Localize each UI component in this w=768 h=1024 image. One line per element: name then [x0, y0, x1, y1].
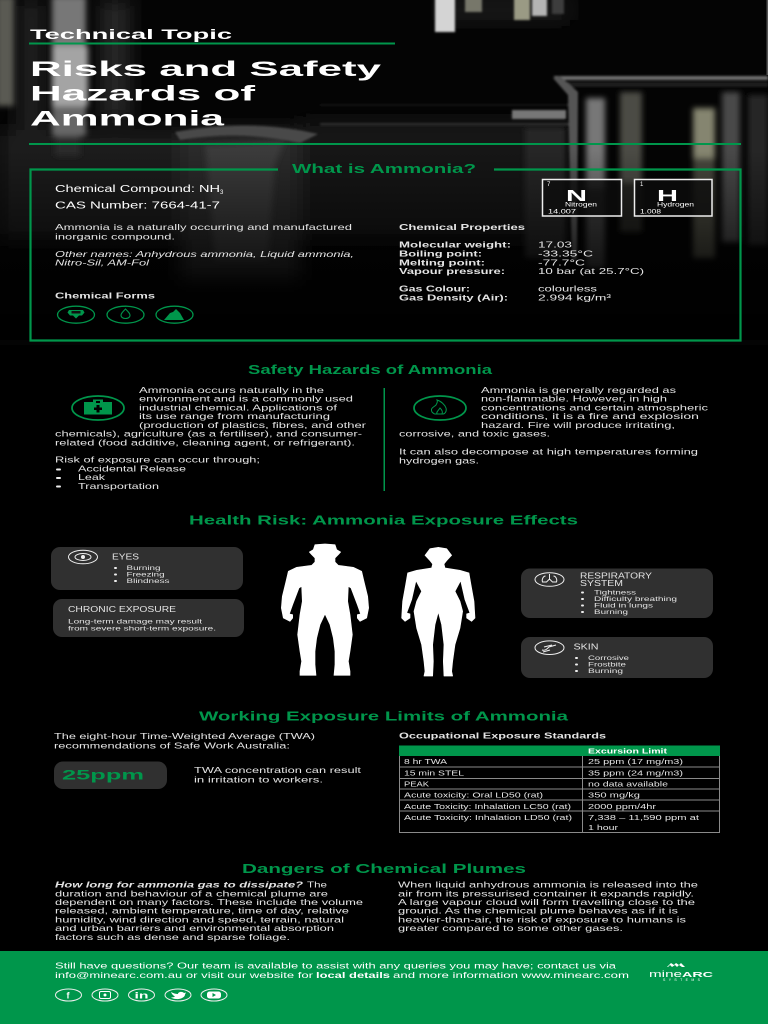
compound and CAS number: Chemical Compound: NH [55, 184, 220, 195]
text: dissipation: dependent on many factors. These include the volume [55, 897, 363, 907]
contact text [55, 961, 629, 980]
icon: lungs [535, 573, 564, 586]
header [29, 26, 395, 130]
logo: MineARC Systems [649, 963, 714, 982]
chemical properties: 17.03 [538, 240, 572, 250]
contact text: and more information www.minearc.com [393, 970, 629, 980]
description: Ammonia is a naturally occurring and manufactured [55, 222, 352, 232]
text: occurrence and applications [55, 385, 366, 448]
panel: respiratory system: RESPIRATORY [580, 572, 653, 580]
icon: youtube [201, 989, 227, 1001]
description [55, 222, 354, 268]
text: flammability: It can also decompose at high temperatures forming [399, 447, 698, 457]
panel: respiratory system: Difficulty breathing [594, 596, 678, 603]
text: flammability: non-flammable. However, in high [481, 394, 667, 404]
icon: facebook: f [66, 990, 70, 1000]
panel: eyes [51, 547, 243, 590]
panel: chronic exposure [53, 599, 244, 637]
panel: respiratory system: Burning [594, 609, 628, 616]
chemical properties: Gas Colour: [399, 283, 470, 293]
icon: instagram [92, 989, 118, 1001]
text: TWA intro [54, 731, 315, 751]
text: occurrence and applications: industrial chemical. Applications of [139, 402, 338, 412]
icon: skin [535, 641, 564, 654]
text: flammability: corrosive, and toxic gases. [399, 429, 550, 439]
logo: MineARC Systems: ARC [682, 970, 714, 979]
list: risk of exposure: Risk of exposure can occur through; [55, 455, 260, 465]
icon: flame [414, 396, 466, 420]
chemical properties: Gas Density (Air): [399, 292, 508, 302]
table: occupational exposure standards [399, 730, 720, 832]
footer [0, 951, 768, 1024]
icon: facebook [56, 989, 82, 1001]
text: dissipation: released, ambient temperature, time of day, relative [55, 906, 349, 916]
chemical properties [399, 222, 644, 302]
figure: male silhouette [281, 544, 369, 675]
element tile: nitrogen: Nitrogen [565, 202, 597, 208]
description: Nitro-Sil, AM-Fol [55, 258, 151, 268]
table: occupational exposure standards: 35 ppm (24 mg/m3) [588, 768, 683, 778]
contact text: local details [316, 970, 390, 980]
kicker: Technical Topic: Technical Topic [30, 26, 232, 42]
figure: female silhouette [402, 547, 475, 676]
icon: twitter [165, 989, 191, 1001]
callout: 25ppm [54, 762, 167, 789]
text: flammability: concentrations and certain atmospheric [481, 402, 709, 412]
text: TWA intro: The eight-hour Time-Weighted Average (TWA) [54, 731, 315, 741]
list: risk of exposure [55, 455, 260, 491]
text: vapour cloud: When liquid anhydrous ammonia is released into the [398, 880, 698, 890]
table: occupational exposure standards: Excursion Limit [588, 746, 668, 755]
element tile: nitrogen: 7 [547, 182, 551, 188]
element tile: hydrogen: H [657, 188, 678, 205]
table: occupational exposure standards: Occupational Exposure Standards [399, 730, 606, 740]
table: occupational exposure standards: Acute Toxicity: Inhalation LC50 (rat) [404, 802, 571, 811]
table: occupational exposure standards: Acute toxicity: Oral LD50 (rat) [404, 790, 543, 800]
chemical properties: Vapour pressure: [399, 266, 505, 276]
chemical forms [55, 291, 193, 323]
panel: skin: Frostbite [588, 662, 626, 668]
title: Hazards of [30, 82, 257, 106]
text: occurrence and applications: (production of plastics, fibres, and other [139, 420, 366, 430]
text: flammability: hydrogen gas. [399, 455, 479, 465]
table: occupational exposure standards: 2000 ppm/4hr [588, 802, 657, 811]
table: occupational exposure standards: 25 ppm (17 mg/m3) [588, 757, 683, 766]
title [30, 58, 382, 130]
list: risk of exposure: Transportation [78, 481, 159, 491]
text: dissipation: duration and behaviour of a chemical plume are [55, 888, 328, 898]
text: dissipation: and urban barriers and environmental absorption [55, 923, 334, 933]
table: occupational exposure standards: PEAK [404, 780, 429, 788]
icon: liquid drop [107, 306, 144, 323]
table: occupational exposure standards: 1 hour [588, 823, 619, 832]
text: vapour cloud: heavier-than-air, the risk of exposure to humans is [398, 914, 686, 924]
text: occurrence and applications: chemicals), agriculture (as a fertiliser), and consumer- [55, 429, 362, 439]
text: TWA effect: TWA concentration can result [194, 765, 362, 775]
contact text: info@minearc.com.au or visit our website for [55, 970, 313, 980]
panel: What is Ammonia [30, 162, 740, 340]
panel: eyes: Burning [126, 565, 161, 572]
text: dissipation [55, 880, 363, 942]
section: Dangers of Chemical Plumes [55, 862, 698, 942]
chemical properties: 2.994 kg/m³ [538, 292, 611, 302]
callout: 25ppm: 25ppm [62, 766, 144, 782]
table: occupational exposure standards: Acute Toxicity: Inhalation LD50 (rat) [404, 813, 572, 822]
chemical forms: Chemical Forms [55, 291, 155, 301]
logo: MineARC Systems: mine [649, 969, 682, 980]
panel: respiratory system [521, 568, 713, 618]
section: Health Risk [51, 514, 713, 678]
chemical properties: Chemical Properties [399, 222, 525, 232]
panel: skin: Burning [588, 668, 624, 675]
element tile: hydrogen: 1.008 [640, 208, 661, 216]
panel: skin: Corrosive [588, 655, 629, 662]
text: TWA effect: in irritation to workers. [194, 775, 323, 785]
text: flammability: hazard. Fire will produce irritating, [481, 420, 675, 430]
background photo: glass beakers [0, 0, 768, 345]
contact text: Still have questions? Our team is available to assist with any queries you may have; contact us via [55, 961, 616, 971]
title: Ammonia [30, 108, 225, 130]
icon: linkedin: in [134, 990, 148, 1000]
text: dissipation: How long for ammonia gas to dissipate? [55, 880, 304, 890]
chemical properties: -77.7°C [538, 257, 585, 267]
text: TWA effect [194, 765, 362, 785]
element tile: nitrogen: 14.007 [548, 208, 577, 216]
text: occurrence and applications: related (food additive, cleaning agent, or refrigerant). [55, 438, 355, 448]
text: occurrence and applications: Ammonia occurs naturally in the [139, 385, 324, 395]
panel: skin [521, 637, 713, 678]
element tile: hydrogen: 1 [640, 182, 644, 188]
section: Working Exposure Limits [54, 710, 720, 832]
text: vapour cloud: greater compared to some other gases. [398, 923, 623, 933]
table: occupational exposure standards: 8 hr TWA [404, 757, 447, 766]
text: flammability: Ammonia is generally regarded as [481, 385, 676, 395]
chemical properties: Melting point: [399, 257, 485, 267]
icon: eye [68, 550, 98, 564]
text: occurrence and applications: environment and is a commonly used [139, 394, 353, 404]
compound and CAS number [55, 184, 224, 212]
chemical properties: Boiling point: [399, 249, 482, 259]
chemical properties: colourless [538, 283, 597, 293]
compound and CAS number: CAS Number: 7664-41-7 [55, 200, 221, 212]
text: TWA intro: recommendations of Safe Work Australia: [54, 741, 290, 751]
panel: chronic exposure: Long-term damage may result [68, 619, 202, 626]
element tile: hydrogen [634, 180, 712, 216]
element tile: nitrogen: N [566, 188, 587, 205]
text: flammability [399, 385, 709, 465]
title: Risks and Safety [30, 58, 382, 81]
panel: eyes: Freezing [126, 572, 165, 578]
element tile: nitrogen [542, 180, 622, 216]
table: occupational exposure standards: 15 min STEL [404, 768, 464, 778]
description: Other names: Anhydrous ammonia, Liquid ammonia, [55, 249, 354, 259]
panel: respiratory system: Fluid in lungs [594, 602, 654, 610]
panel: respiratory system: Tightness [594, 590, 637, 596]
table: occupational exposure standards: no data available [588, 780, 668, 788]
text: occurrence and applications: its use range from manufacturing [139, 411, 330, 421]
heading: What is Ammonia: What is Ammonia? [292, 162, 476, 176]
heading: Safety Hazards: Safety Hazards of Ammonia [248, 363, 494, 377]
panel: eyes: EYES [112, 552, 139, 562]
heading: Dangers: Dangers of Chemical Plumes [242, 862, 526, 876]
panel: eyes: Blindness [126, 578, 171, 585]
panel: chronic exposure: CHRONIC EXPOSURE [68, 605, 176, 614]
text: vapour cloud [398, 880, 698, 933]
chemical properties: -33.35°C [538, 249, 593, 259]
chemical properties: Molecular weight: [399, 240, 511, 250]
text: flammability: conditions, it is a fire and explosion [481, 411, 699, 421]
chemical properties: 10 bar (at 25.7°C) [538, 266, 644, 276]
text: vapour cloud: A large vapour cloud will form travelling close to the [398, 897, 695, 907]
list: risk of exposure: Leak [78, 472, 106, 482]
heading: Health Risk: Health Risk: Ammonia Exposure Effects [189, 514, 578, 528]
panel: skin: SKIN [574, 643, 599, 652]
icon: solid pile [156, 306, 193, 323]
kicker rule [29, 42, 395, 44]
table: occupational exposure standards: 350 mg/kg [588, 790, 640, 800]
logo: MineARC Systems: SYSTEMS [663, 978, 701, 982]
icon: linkedin [128, 989, 154, 1001]
text: dissipation: The [307, 880, 327, 890]
section: Safety Hazards of Ammonia [55, 363, 709, 491]
text: vapour cloud: air from its pressurised container it expands rapidly. [398, 888, 694, 898]
social icons [56, 989, 227, 1001]
heading: Working Exposure Limits: Working Exposure Limits of Ammonia [199, 710, 570, 724]
text: dissipation: factors such as dense and sparse foliage. [55, 932, 290, 942]
text: dissipation: humidity, wind direction and speed, terrain, natural [55, 914, 344, 924]
text: vapour cloud: ground. As the chemical plume behaves as if it is [398, 906, 678, 916]
table: occupational exposure standards: 7,338 – 11,590 ppm at [588, 813, 699, 822]
list: risk of exposure: Accidental Release [78, 464, 186, 474]
icon: gas mask [58, 306, 94, 323]
element tile: hydrogen: Hydrogen [657, 202, 695, 208]
icon: first aid kit [72, 396, 124, 420]
compound and CAS number: 3 [220, 190, 224, 196]
panel: respiratory system: SYSTEM [580, 579, 623, 588]
description: inorganic compound. [55, 232, 175, 242]
panel frame [30, 170, 740, 340]
panel: chronic exposure: from severe short-term exposure. [68, 626, 216, 632]
